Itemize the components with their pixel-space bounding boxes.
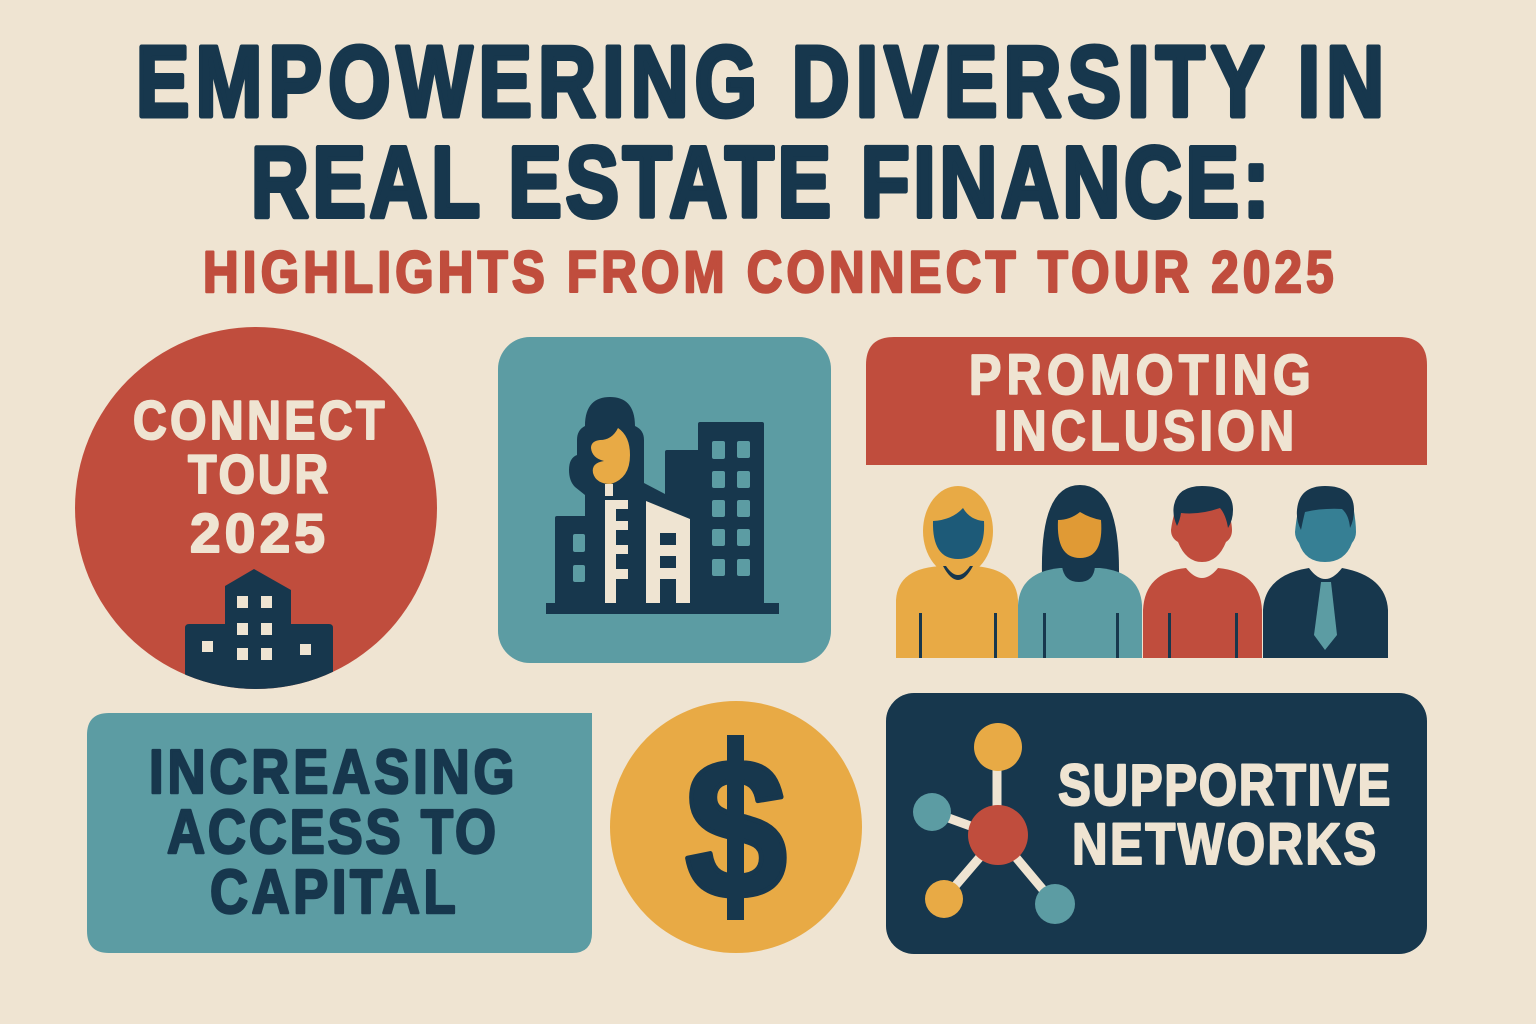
capital heading: ACCESS TO — [167, 798, 496, 867]
icon: building in badge — [185, 569, 333, 700]
subtitle: HIGHLIGHTS FROM CONNECT TOUR 2025 — [203, 240, 1333, 305]
person: red sweater — [1143, 486, 1262, 658]
person: yellow hood — [896, 486, 1018, 658]
icon: tree trunk and light buildings — [605, 484, 690, 603]
icon: tree foliage — [591, 428, 630, 484]
title — [136, 27, 1384, 239]
icon: dollar coin — [610, 701, 862, 953]
title: EMPOWERING DIVERSITY IN — [136, 27, 1384, 138]
banner heading: INCLUSION — [994, 399, 1294, 463]
panel: supportive networks — [886, 693, 1427, 954]
badge label: 2025 — [190, 502, 325, 564]
networks heading — [1058, 753, 1390, 877]
person: navy suit — [1263, 486, 1388, 658]
badge label: TOUR — [188, 443, 328, 505]
icon: network graph — [913, 723, 1075, 924]
networks heading: NETWORKS — [1072, 812, 1376, 877]
badge label: CONNECT — [133, 389, 385, 451]
capital heading: CAPITAL — [210, 858, 456, 927]
icon: dollar coin: $ — [685, 718, 787, 941]
panel: city icon tile — [498, 337, 831, 663]
banner heading — [969, 343, 1311, 463]
person: teal sweater — [1018, 485, 1142, 658]
panel: increasing access to capital — [87, 713, 592, 953]
capital heading — [149, 738, 514, 927]
badge label — [133, 389, 385, 564]
title: REAL ESTATE FINANCE: — [251, 127, 1269, 239]
icon: skyline — [546, 397, 779, 614]
capital heading: INCREASING — [149, 738, 515, 807]
panel: promoting inclusion banner — [866, 337, 1427, 465]
banner heading: PROMOTING — [969, 343, 1311, 407]
icon: four people — [896, 485, 1388, 658]
panel: connect tour badge — [75, 327, 437, 700]
networks heading: SUPPORTIVE — [1058, 753, 1390, 818]
